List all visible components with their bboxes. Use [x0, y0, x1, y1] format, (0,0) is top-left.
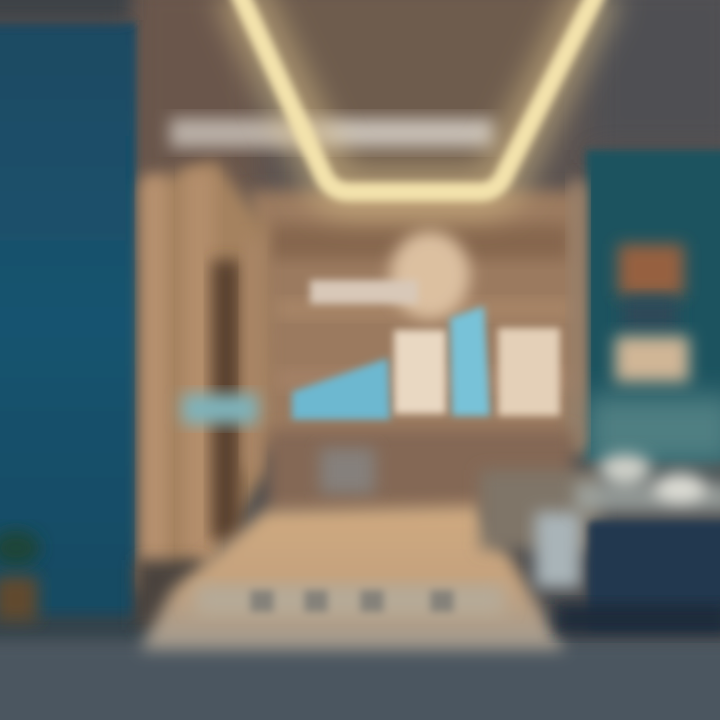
floor — [0, 505, 720, 720]
shadow beside floor — [135, 560, 205, 630]
left blue wall — [0, 0, 150, 645]
sofa cushions — [575, 454, 720, 512]
row of stools — [195, 585, 505, 615]
ceiling background — [0, 0, 720, 260]
chart blue area — [292, 358, 390, 420]
wall art poster — [615, 244, 689, 382]
plant in pot — [0, 530, 40, 622]
chart cream panels — [394, 328, 560, 416]
chart label — [310, 280, 418, 304]
ceiling light strip glow — [238, 0, 598, 192]
sofa — [480, 454, 720, 634]
wall chart — [182, 280, 560, 424]
blurred white heading band — [170, 118, 495, 148]
chart blue bar — [450, 306, 490, 416]
wooden column and doorway — [142, 160, 268, 590]
lower wall and furniture — [268, 430, 573, 515]
back wall in wood tones — [250, 190, 590, 450]
right teal wall — [570, 150, 720, 465]
chart blue left block — [182, 394, 258, 424]
